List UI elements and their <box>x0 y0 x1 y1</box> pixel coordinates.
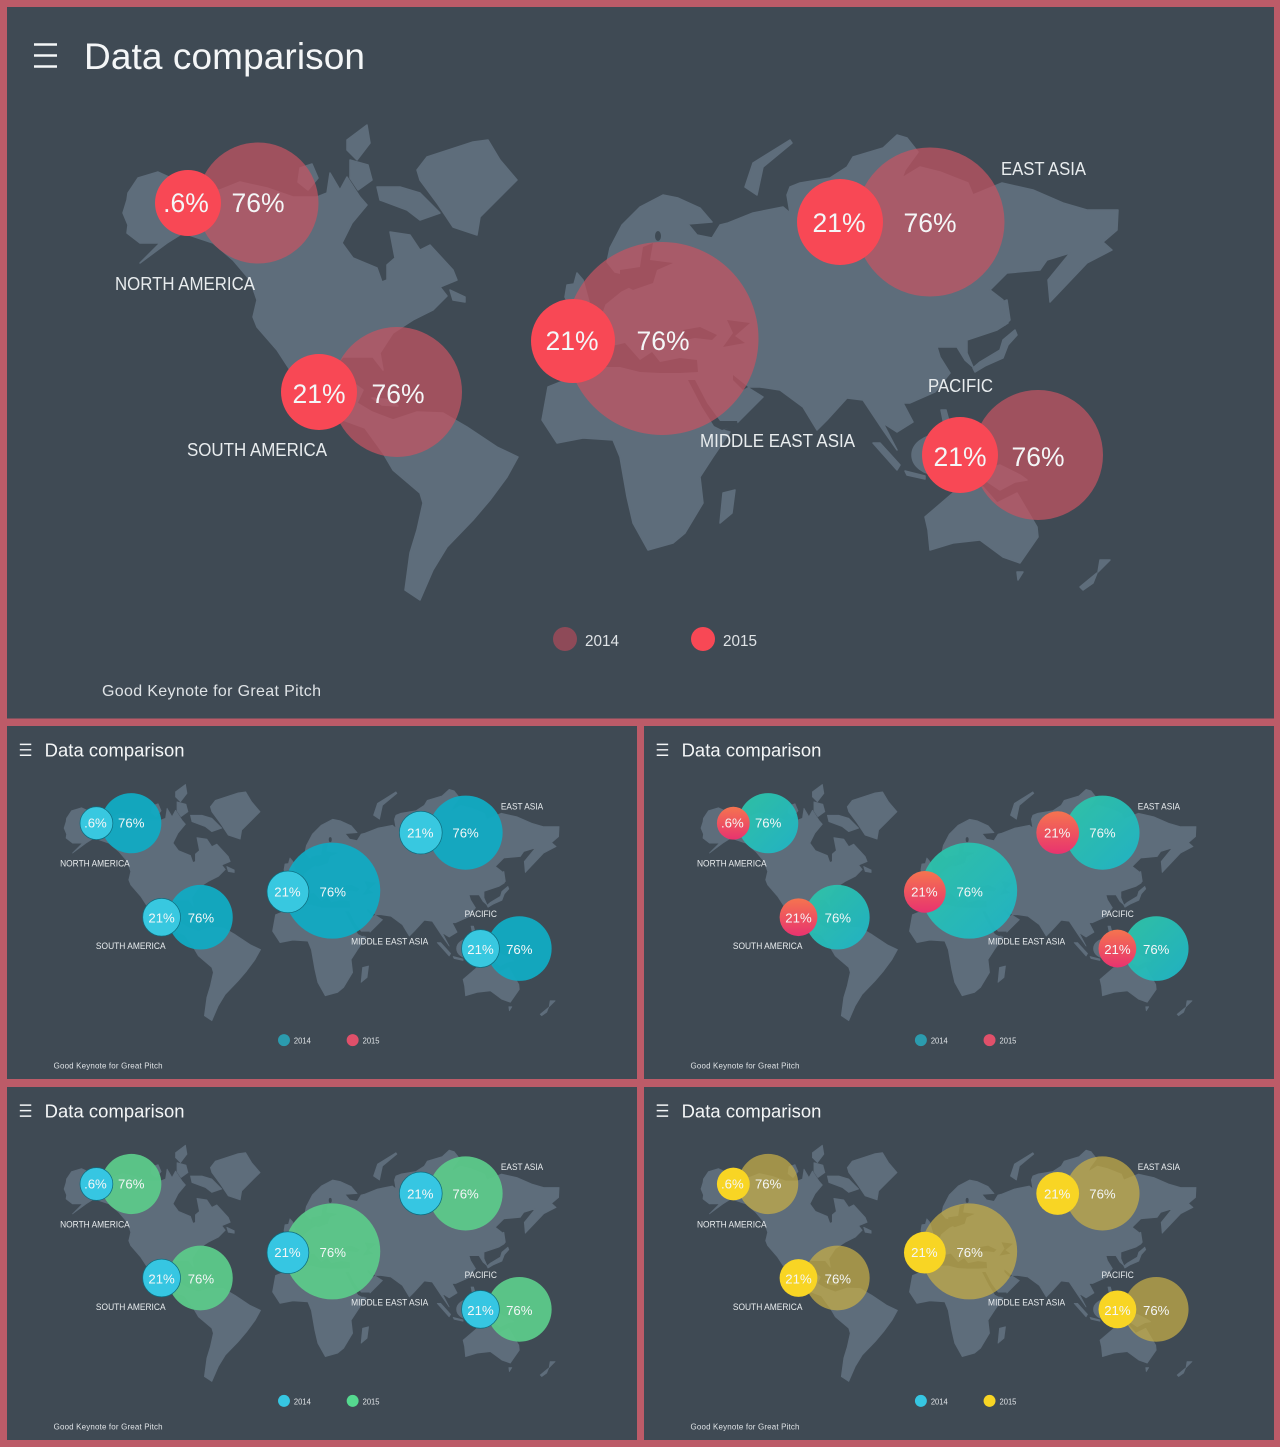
label: south america: SOUTH AMERICA <box>96 941 166 951</box>
bubbles: south america: 21% <box>785 911 812 926</box>
bubbles: south america: 21% <box>148 1271 175 1286</box>
bubbles: north america <box>80 1154 161 1214</box>
label: middle east asia: MIDDLE EAST ASIA <box>988 937 1065 947</box>
label: south america: SOUTH AMERICA <box>733 941 803 951</box>
bubbles: south america <box>281 327 462 457</box>
footer text: Good Keynote for Great Pitch <box>102 683 321 700</box>
legend <box>278 1034 380 1046</box>
bubbles: middle east asia: 21% <box>911 884 938 899</box>
icon: menu <box>34 44 57 66</box>
label: middle east asia: MIDDLE EAST ASIA <box>700 431 855 451</box>
legend: 2014 <box>931 1037 948 1046</box>
bubbles: south america <box>780 885 870 950</box>
label: middle east asia: MIDDLE EAST ASIA <box>351 1297 428 1307</box>
bubbles: pacific <box>922 390 1103 520</box>
bubbles: south america: 76% <box>188 911 214 926</box>
bubbles: north america: .6% <box>84 1176 107 1191</box>
bubbles: middle east asia: 21% <box>274 1245 301 1260</box>
label: north america: NORTH AMERICA <box>697 858 767 868</box>
label: pacific: PACIFIC <box>465 1270 497 1280</box>
icon: menu <box>20 1105 31 1116</box>
world map <box>123 125 1118 600</box>
label: south america: SOUTH AMERICA <box>187 440 327 460</box>
world map <box>701 1145 1196 1382</box>
bubbles: north america: .6% <box>721 1176 744 1191</box>
bubbles: pacific <box>462 916 552 981</box>
label: middle east asia: MIDDLE EAST ASIA <box>351 937 428 947</box>
bubbles: middle east asia <box>267 843 380 939</box>
label: middle east asia: MIDDLE EAST ASIA <box>988 1297 1065 1307</box>
label: north america: NORTH AMERICA <box>115 274 255 294</box>
label: north america: NORTH AMERICA <box>60 1219 130 1229</box>
bubbles: south america <box>143 885 233 950</box>
panel: yellow variant <box>644 1087 1274 1440</box>
footer text: Good Keynote for Great Pitch <box>54 1061 163 1070</box>
heading: Data comparison <box>45 740 184 761</box>
label: pacific: PACIFIC <box>465 909 497 919</box>
bubbles: north america: .6% <box>84 816 107 831</box>
label: pacific: PACIFIC <box>1101 1270 1134 1280</box>
bubbles: pacific: 76% <box>1011 442 1065 472</box>
icon: menu <box>657 744 668 755</box>
bubbles: east asia: 21% <box>407 826 434 841</box>
legend <box>553 627 757 651</box>
panel: green variant <box>7 1087 637 1440</box>
heading: Data comparison <box>682 740 821 761</box>
bubbles: pacific: 76% <box>1143 942 1170 957</box>
legend: 2015 <box>363 1397 380 1406</box>
bubbles: north america: .6% <box>163 188 209 218</box>
legend: 2015 <box>723 633 757 650</box>
bubbles: east asia: 21% <box>1044 1186 1071 1201</box>
bubbles: middle east asia: 76% <box>956 884 983 899</box>
world map <box>64 784 559 1021</box>
bubbles: middle east asia <box>904 843 1017 939</box>
bubbles: middle east asia <box>904 1203 1017 1299</box>
bubbles: middle east asia: 76% <box>320 884 346 899</box>
label: south america: SOUTH AMERICA <box>96 1302 166 1312</box>
label: east asia: EAST ASIA <box>1001 159 1086 179</box>
bubbles: east asia <box>1036 1156 1140 1231</box>
heading: Data comparison <box>682 1100 821 1121</box>
bubbles: east asia <box>399 1156 503 1231</box>
label: east asia: EAST ASIA <box>501 1162 543 1172</box>
bubbles: east asia <box>797 148 1004 296</box>
bubbles: east asia: 76% <box>452 1186 479 1201</box>
label: north america: NORTH AMERICA <box>697 1219 767 1229</box>
bubbles: middle east asia: 76% <box>320 1245 346 1260</box>
bubbles: pacific: 76% <box>1143 1303 1170 1318</box>
bubbles: middle east asia <box>267 1203 380 1299</box>
label: east asia: EAST ASIA <box>501 801 543 811</box>
label: north america: NORTH AMERICA <box>60 858 130 868</box>
bubbles: north america: 76% <box>755 1176 782 1191</box>
bubbles: pacific <box>462 1277 552 1342</box>
bubbles: pacific: 76% <box>506 1303 533 1318</box>
label: south america: SOUTH AMERICA <box>733 1302 803 1312</box>
bubbles: east asia: 21% <box>407 1186 434 1201</box>
bubbles: east asia: 21% <box>812 208 866 238</box>
bubbles: pacific <box>1098 916 1189 981</box>
footer text: Good Keynote for Great Pitch <box>691 1422 799 1431</box>
footer text: Good Keynote for Great Pitch <box>54 1422 163 1431</box>
label: pacific: PACIFIC <box>928 376 993 396</box>
label: east asia: EAST ASIA <box>1138 801 1180 811</box>
bubbles: south america <box>780 1246 870 1310</box>
bubbles: pacific: 76% <box>506 942 533 957</box>
bubbles: north america <box>717 793 798 853</box>
bubbles: south america <box>143 1246 233 1310</box>
bubbles: south america: 76% <box>188 1271 214 1286</box>
bubbles: middle east asia: 76% <box>636 326 690 356</box>
bubbles: south america: 21% <box>292 379 346 409</box>
bubbles: north america: 76% <box>755 816 782 831</box>
bubbles: east asia <box>1036 796 1140 870</box>
legend: 2015 <box>999 1397 1017 1406</box>
bubbles: middle east asia: 21% <box>545 326 599 356</box>
bubbles: south america: 21% <box>785 1271 812 1286</box>
bubbles: north america: 76% <box>231 188 285 218</box>
bubbles: south america: 76% <box>825 911 851 926</box>
panel: blue variant <box>7 726 637 1079</box>
legend: 2014 <box>931 1397 948 1406</box>
bubbles: east asia: 21% <box>1044 826 1071 841</box>
legend: 2015 <box>363 1037 380 1046</box>
bubbles: middle east asia: 21% <box>911 1245 938 1260</box>
bubbles: pacific: 21% <box>1104 1303 1131 1318</box>
heading: Data comparison <box>84 36 365 77</box>
bubbles: east asia <box>399 796 503 870</box>
bubbles: east asia: 76% <box>452 826 479 841</box>
bubbles: pacific: 21% <box>467 1303 494 1318</box>
label: pacific: PACIFIC <box>1101 909 1134 919</box>
icon: menu <box>657 1105 668 1116</box>
footer text: Good Keynote for Great Pitch <box>691 1061 799 1070</box>
bubbles: north america <box>155 142 318 264</box>
bubbles: north america <box>717 1154 798 1214</box>
legend: 2014 <box>294 1037 311 1046</box>
legend <box>915 1034 1017 1046</box>
bubbles: north america: 76% <box>118 816 145 831</box>
bubbles: south america: 21% <box>148 911 175 926</box>
bubbles: middle east asia <box>531 242 758 435</box>
bubbles: pacific: 21% <box>467 942 494 957</box>
panel: large red map <box>7 7 1274 718</box>
icon: menu <box>20 744 31 755</box>
bubbles: pacific: 21% <box>1104 942 1131 957</box>
bubbles: north america: 76% <box>118 1176 145 1191</box>
bubbles: east asia: 76% <box>1089 1186 1116 1201</box>
heading: Data comparison <box>45 1100 184 1121</box>
legend: 2014 <box>294 1397 311 1406</box>
legend: 2014 <box>585 633 619 650</box>
bubbles: middle east asia: 21% <box>274 884 301 899</box>
legend: 2015 <box>999 1037 1017 1046</box>
bubbles: middle east asia: 76% <box>956 1245 983 1260</box>
label: east asia: EAST ASIA <box>1138 1162 1180 1172</box>
bubbles: east asia: 76% <box>1089 826 1116 841</box>
world map <box>701 784 1196 1021</box>
bubbles: pacific <box>1098 1277 1189 1342</box>
panel: teal and pink variant <box>644 726 1274 1079</box>
world map <box>64 1145 559 1382</box>
bubbles: north america: .6% <box>721 816 744 831</box>
legend <box>915 1395 1017 1407</box>
bubbles: south america: 76% <box>825 1271 851 1286</box>
bubbles: north america <box>80 793 161 853</box>
bubbles: south america: 76% <box>371 379 425 409</box>
legend <box>278 1395 380 1407</box>
bubbles: pacific: 21% <box>933 442 987 472</box>
bubbles: east asia: 76% <box>903 208 957 238</box>
